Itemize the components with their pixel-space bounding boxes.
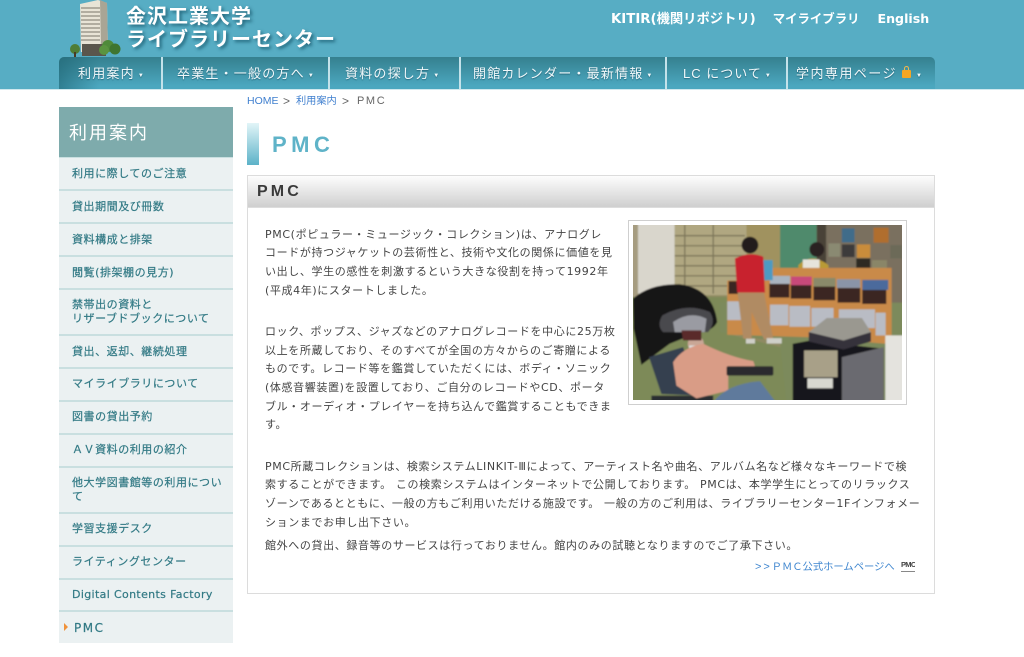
official site link: >>ＰＭＣ公式ホームページへ (755, 561, 895, 573)
text: ブル・オーディオ・プレイヤーを持ち込んで鑑賞することもできま (265, 400, 612, 413)
breadcrumb: > (283, 94, 290, 108)
sidebar item: て (72, 490, 84, 503)
page title (247, 123, 334, 165)
sidebar item: current page (59, 612, 233, 643)
panel heading: PMC (257, 183, 302, 200)
text: コードが持つジャケットの芸術性と、技術や文化の関係に価値を見 (265, 246, 613, 259)
site logo text (126, 6, 337, 51)
text: (平成4年)にスタートしました。 (265, 284, 434, 297)
title accent bar (247, 123, 259, 165)
nav item: 卒業生・一般の方へ ▼ (177, 66, 314, 81)
breadcrumb (247, 94, 386, 108)
breadcrumb: HOME (247, 95, 278, 107)
site logo text: 金沢工業大学 (126, 6, 252, 28)
body paragraph 4: 館外への貸出、録音等のサービスは行っておりません。館内のみの試聴となりますのでご了承下さい。 (265, 539, 798, 552)
main navigation bar (59, 57, 935, 89)
body paragraph 2 (265, 325, 615, 431)
sidebar item: 資料構成と排架 (72, 233, 153, 246)
breadcrumb: 利用案内 (296, 96, 337, 107)
title text: PMC (272, 132, 334, 157)
top utility links: KITIR(機関リポジトリ) マイライブラリ English (611, 11, 929, 27)
sidebar item (59, 468, 233, 514)
sidebar item: 閲覧(排架棚の見方) (72, 266, 174, 279)
sidebar item: current page: PMC (74, 621, 104, 635)
sidebar item (59, 224, 233, 257)
sidebar item: 貸出、返却、継続処理 (72, 345, 188, 358)
sidebar heading: 利用案内 (69, 123, 149, 143)
sidebar item (59, 158, 233, 191)
text: ロック、ポップス、ジャズなどのアナログレコードを中心に25万枚 (265, 325, 615, 338)
text: PMC(ポピュラー・ミュージック・コレクション)は、アナログレ (265, 228, 602, 241)
breadcrumb: PMC (357, 95, 386, 107)
sidebar item (59, 435, 233, 468)
text: ものです。レコード等を鑑賞していただくには、ボディ・ソニック (265, 362, 611, 375)
text: い出し、学生の感性を刺激するという大きな役割を持って1992年 (265, 265, 609, 278)
icon: library building with trees (70, 0, 120, 57)
sidebar item: リザーブドブックについて (72, 312, 210, 325)
sidebar item (59, 257, 233, 290)
sidebar item: 学習支援デスク (72, 522, 153, 535)
sidebar item (59, 580, 233, 612)
sidebar item: 禁帯出の資料と (72, 298, 153, 311)
text: 以上を所蔵しており、そのすべてが全国の方々からのご寄贈による (265, 344, 611, 357)
sidebar item (59, 547, 233, 580)
sidebar item: ライティングセンター (72, 555, 187, 568)
nav item: LC について ▼ (683, 66, 771, 81)
sidebar item (59, 191, 233, 224)
panel heading (248, 176, 934, 208)
nav item: 資料の探し方 ▼ (345, 66, 439, 81)
body paragraph 1 (265, 228, 613, 297)
body paragraph 3 (265, 460, 920, 529)
sidebar heading (59, 107, 233, 158)
nav arrow: ▼ (916, 73, 922, 79)
nav item: 利用案内 ▼ (78, 66, 144, 81)
text: す。 (265, 418, 287, 431)
nav item: 学内専用ページ (796, 66, 897, 81)
icon: lock (902, 66, 911, 78)
breadcrumb: > (342, 94, 349, 108)
text: ゾーンであるとともに、一般の方もご利用いただける施設です。 一般の方のご利用は、ライブラリーセンター1Fインフォメー (265, 497, 920, 510)
sidebar item (59, 369, 233, 402)
header band (0, 0, 1024, 90)
photo frame (628, 220, 907, 405)
text: 索することができます。 この検索システムはインターネットで公開しております。 PMCは、本学学生にとってのリラックス (265, 478, 910, 491)
text: ションまでお申し出下さい。 (265, 516, 416, 529)
sidebar item (59, 336, 233, 369)
nav item: 開館カレンダー・最新情報 ▼ (473, 66, 652, 81)
sidebar item (59, 402, 233, 435)
text: PMC所蔵コレクションは、検索システムLINKIT-Ⅲによって、アーティスト名や曲名、アルバム名など様々なキーワードで検 (265, 460, 907, 473)
sidebar item: 図書の貸出予約 (72, 410, 153, 423)
sidebar item: マイライブラリについて (72, 377, 199, 390)
content panel (247, 175, 935, 594)
photo: listening room with body sonic chair and record shelves (633, 225, 902, 400)
sidebar item (59, 514, 233, 547)
site logo text: ライブラリーセンター (126, 29, 336, 51)
sidebar item: Digital Contents Factory (72, 588, 213, 601)
sidebar item: 他大学図書館等の利用につい (72, 476, 222, 489)
sidebar item: ＡＶ資料の利用の紹介 (72, 443, 188, 456)
sidebar item (59, 290, 233, 336)
sidebar item: 貸出期間及び冊数 (72, 200, 164, 213)
nav background (59, 57, 935, 89)
text: (体感音響装置)を設置しており、ご自分のレコードやCD、ポータ (265, 381, 605, 394)
sidebar item: 利用に際してのご注意 (72, 167, 187, 180)
